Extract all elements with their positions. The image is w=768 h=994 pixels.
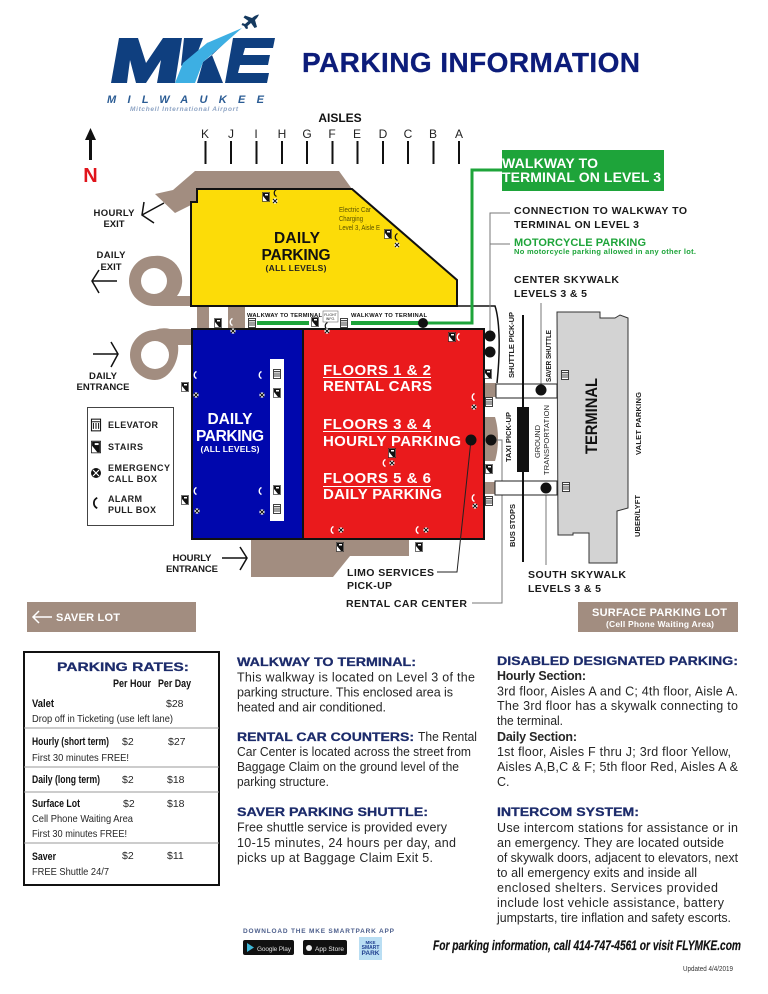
map labels: EXIT	[100, 262, 122, 273]
aisle labels: C	[404, 127, 413, 141]
text block: rental car counters: RENTAL CAR COUNTERS:	[237, 732, 414, 744]
panel: blue daily parking: DAILY	[208, 411, 253, 428]
text block: intercom system: include lost vehicle assistance, battery	[497, 896, 725, 910]
panel: parking rates: $2	[123, 798, 135, 810]
panel: parking rates: $27	[168, 736, 186, 748]
text block: saver parking shuttle	[237, 807, 456, 865]
vertical labels: BUS STOPS	[508, 504, 517, 547]
map labels: ENTRANCE	[166, 564, 218, 575]
panel: yellow daily parking: Charging	[339, 216, 363, 223]
panel: parking rates: First 30 minutes FREE!	[32, 828, 127, 840]
map labels: PICK-UP	[347, 580, 392, 592]
panel: red hourly and rental: HOURLY PARKING	[323, 433, 461, 450]
text block: disabled designated parking: 1st floor, Aisles F thru J; 3rd floor Yellow,	[497, 745, 731, 759]
panel: parking rates: First 30 minutes FREE!	[32, 752, 129, 764]
vertical labels: GROUND	[533, 424, 542, 458]
panel: parking rates: Surface Lot	[32, 798, 80, 810]
panel: blue daily parking: PARKING	[196, 428, 264, 445]
map labels: CONNECTION TO WALKWAY TO	[514, 205, 687, 217]
panel: parking rates: Hourly (short term)	[32, 736, 109, 748]
surface parking lot bar: SURFACE PARKING LOT	[592, 607, 727, 619]
roads	[129, 171, 498, 577]
vertical labels: SAVER SHUTTLE	[544, 330, 553, 382]
app download: SMART	[362, 945, 379, 951]
text block: walkway to terminal: parking structure. This enclosed area is	[237, 686, 453, 700]
legend: CALL BOX	[108, 474, 157, 484]
map labels: RENTAL CAR CENTER	[346, 598, 467, 610]
text block: disabled designated parking: the terminal.	[497, 714, 563, 728]
text block: saver parking shuttle: SAVER PARKING SHUTTLE:	[237, 807, 428, 819]
aisle labels: E	[353, 127, 361, 141]
walkway to terminal strip	[247, 311, 427, 325]
text block: rental car counters: parking structure.	[237, 775, 329, 789]
app download: Google Play	[257, 946, 292, 953]
text block: intercom system: of skywalk doors, adjacent to elevators, next	[497, 851, 739, 865]
text block: intercom system: enclosed shelters. Services provided	[497, 881, 718, 895]
saver lot bar	[27, 602, 196, 632]
panel: red hourly and rental: FLOORS 3 & 4	[323, 416, 432, 433]
legend: ALARM	[108, 494, 142, 504]
text block: rental car counters: Baggage Claim on the ground level of the	[237, 760, 459, 774]
panel: parking rates	[24, 652, 219, 885]
panel: red hourly and rental: FLOORS 1 & 2	[323, 362, 431, 379]
text block: intercom system: INTERCOM SYSTEM:	[497, 807, 639, 819]
text block: disabled designated parking: Aisles A,B,C & F; 5th floor Red, Aisles A &	[497, 760, 739, 774]
text block: rental car counters	[237, 730, 477, 789]
legend: ELEVATOR	[108, 420, 158, 430]
panel: parking rates: $28	[166, 698, 184, 710]
map labels: DAILY	[89, 371, 118, 382]
panel: parking rates: $18	[167, 774, 185, 786]
text block: disabled designated parking: DISABLED DESIGNATED PARKING:	[497, 656, 738, 668]
text block: disabled designated parking: Hourly Section:	[497, 669, 586, 683]
text block: disabled designated parking: C.	[497, 775, 510, 789]
green walkway connector	[423, 170, 502, 323]
aisle labels: J	[228, 127, 234, 141]
panel: parking rates: $11	[167, 850, 184, 862]
map labels: HOURLY	[94, 208, 135, 219]
title: PARKING INFORMATION	[302, 47, 640, 78]
text block: walkway to terminal: This walkway is located on Level 3 of the	[237, 670, 475, 684]
motorcycle parking note: MOTORCYCLE PARKING	[514, 237, 646, 249]
panel: parking rates: Saver	[32, 851, 57, 863]
north arrow: N	[83, 165, 98, 187]
legend: STAIRS	[108, 442, 143, 452]
aisle labels: F	[328, 127, 336, 141]
logo: MKE Milwaukee: Mitchell International Airport	[130, 106, 239, 113]
app download	[243, 928, 395, 960]
text block: rental car counters: The Rental	[418, 730, 477, 744]
text block: disabled designated parking: 3rd floor, Aisles A and C; 4th floor, Aisle A.	[497, 684, 738, 698]
panel: yellow daily parking: Level 3, Aisle E	[339, 225, 380, 232]
text block: intercom system: jumpstarts, tire inflation and safety escorts.	[496, 911, 731, 925]
vertical labels: UBER/LYFT	[633, 495, 642, 537]
callout: walkway on level 3: WALKWAY TO	[502, 155, 598, 171]
panel: parking rates: Per Hour	[113, 678, 152, 690]
exit and entrance arrows	[92, 202, 247, 570]
updated date: Updated 4/4/2019	[683, 966, 733, 973]
panel: parking rates: $2	[122, 850, 134, 862]
text block: intercom system: Use intercom stations for assistance or in	[497, 821, 738, 835]
panel: yellow daily parking	[191, 189, 457, 306]
text block: disabled designated parking	[497, 656, 739, 789]
aisle labels: K	[201, 127, 209, 141]
panel: red hourly and rental	[303, 329, 484, 539]
panel: yellow daily parking: PARKING	[262, 247, 330, 264]
panel: parking rates: Cell Phone Waiting Area	[32, 813, 133, 825]
vertical labels	[504, 312, 643, 547]
walkway outline	[191, 306, 499, 383]
app download: MKE	[366, 940, 376, 945]
panel: parking rates: Drop off in Ticketing (use left lane)	[32, 713, 173, 725]
panel: parking rates: Valet	[32, 698, 54, 710]
panel: parking rates: Daily (long term)	[32, 774, 100, 786]
text block: walkway to terminal	[237, 657, 475, 714]
panel: parking rates: $2	[122, 774, 134, 786]
app download: App Store	[315, 946, 344, 953]
map labels: TERMINAL ON LEVEL 3	[514, 219, 639, 231]
text block: rental car counters: Car Center is located across the street from	[237, 745, 471, 759]
motorcycle parking note: No motorcycle parking allowed in any other lot.	[514, 247, 696, 256]
map labels: LEVELS 3 & 5	[528, 583, 601, 595]
vertical labels: SHUTTLE PICK-UP	[507, 312, 516, 378]
walkway to terminal strip: FLIGHT	[324, 313, 338, 317]
text block: intercom system: to all emergency exits and inside all	[497, 866, 697, 880]
vertical labels: TAXI PICK-UP	[504, 412, 513, 462]
map labels	[76, 205, 687, 610]
skywalks and road lanes	[495, 315, 557, 562]
text block: intercom system	[496, 807, 739, 925]
text block: walkway to terminal: heated and air conditioned.	[237, 700, 386, 714]
legend	[88, 408, 174, 526]
walkway to terminal strip: WALKWAY TO TERMINAL	[351, 313, 427, 319]
motorcycle parking note	[514, 237, 696, 256]
surface parking lot bar: (Cell Phone Waiting Area)	[606, 619, 714, 629]
panel: yellow daily parking: Electric Car	[339, 207, 372, 214]
leader lines	[472, 213, 546, 603]
app download: PARK	[362, 950, 380, 957]
text block: intercom system: an emergency. They are located outside	[497, 836, 724, 850]
saver lot bar: SAVER LOT	[56, 612, 120, 624]
vertical labels: TRANSPORTATION	[542, 405, 551, 475]
panel: terminal	[557, 312, 628, 563]
text block: disabled designated parking: The 3rd floor has a skywalk connecting to	[497, 699, 738, 713]
panel: blue daily parking	[192, 329, 303, 539]
map labels: LIMO SERVICES	[347, 567, 434, 579]
aisle labels: B	[429, 127, 437, 141]
text block: saver parking shuttle: Free shuttle service is provided every	[237, 820, 448, 834]
panel: parking rates: $2	[122, 736, 134, 748]
logo: MKE Milwaukee	[107, 14, 275, 113]
walkway to terminal strip: INFO.	[326, 317, 335, 321]
facility icons	[182, 190, 570, 552]
aisle labels: AISLES	[318, 111, 362, 125]
panel: red hourly and rental: RENTAL CARS	[323, 378, 432, 395]
panel: red hourly and rental: DAILY PARKING	[323, 486, 442, 503]
text block: walkway to terminal: WALKWAY TO TERMINAL:	[237, 657, 416, 669]
legend: PULL BOX	[108, 505, 156, 515]
map labels: SOUTH SKYWALK	[528, 569, 626, 581]
text block: saver parking shuttle: picks up at Baggage Claim Exit 5.	[237, 851, 433, 865]
surface parking lot bar	[578, 602, 738, 632]
text block: saver parking shuttle: 10-15 minutes, 24 hours per day, and	[237, 836, 456, 850]
north arrow	[83, 128, 98, 187]
vertical labels: VALET PARKING	[634, 392, 643, 455]
panel: yellow daily parking: (ALL LEVELS)	[266, 263, 327, 273]
panel: red hourly and rental: FLOORS 5 & 6	[323, 470, 431, 487]
panel: parking rates: $18	[167, 798, 185, 810]
map labels: ENTRANCE	[76, 382, 130, 393]
app download: DOWNLOAD THE MKE SMARTPARK APP	[243, 928, 395, 935]
aisle labels: I	[254, 127, 258, 141]
panel: terminal: TERMINAL	[583, 378, 601, 454]
callout: walkway on level 3	[502, 150, 664, 191]
map labels: EXIT	[104, 219, 125, 230]
panel: yellow daily parking: DAILY	[274, 230, 321, 247]
map labels: HOURLY	[172, 553, 212, 564]
map labels: DAILY	[96, 250, 126, 261]
aisle labels: G	[302, 127, 312, 141]
legend: EMERGENCY	[108, 463, 170, 473]
aisle labels: A	[455, 127, 463, 141]
panel: parking rates: Per Day	[158, 678, 192, 690]
map labels: CENTER SKYWALK	[514, 274, 619, 286]
callout: walkway on level 3: TERMINAL ON LEVEL 3	[502, 169, 661, 185]
logo: MKE Milwaukee: MILWAUKEE	[107, 94, 265, 106]
text block: disabled designated parking: Daily Section:	[497, 730, 577, 744]
map labels: LEVELS 3 & 5	[514, 288, 587, 300]
aisle labels: H	[278, 127, 286, 141]
panel: parking rates: FREE Shuttle 24/7	[32, 866, 109, 878]
panel: parking rates: PARKING RATES:	[57, 660, 189, 674]
aisle labels: D	[379, 127, 388, 141]
panel: blue daily parking: (ALL LEVELS)	[200, 444, 260, 454]
aisle labels	[201, 111, 463, 164]
walkway to terminal strip: WALKWAY TO TERMINAL	[247, 313, 322, 319]
black markers	[418, 318, 552, 494]
